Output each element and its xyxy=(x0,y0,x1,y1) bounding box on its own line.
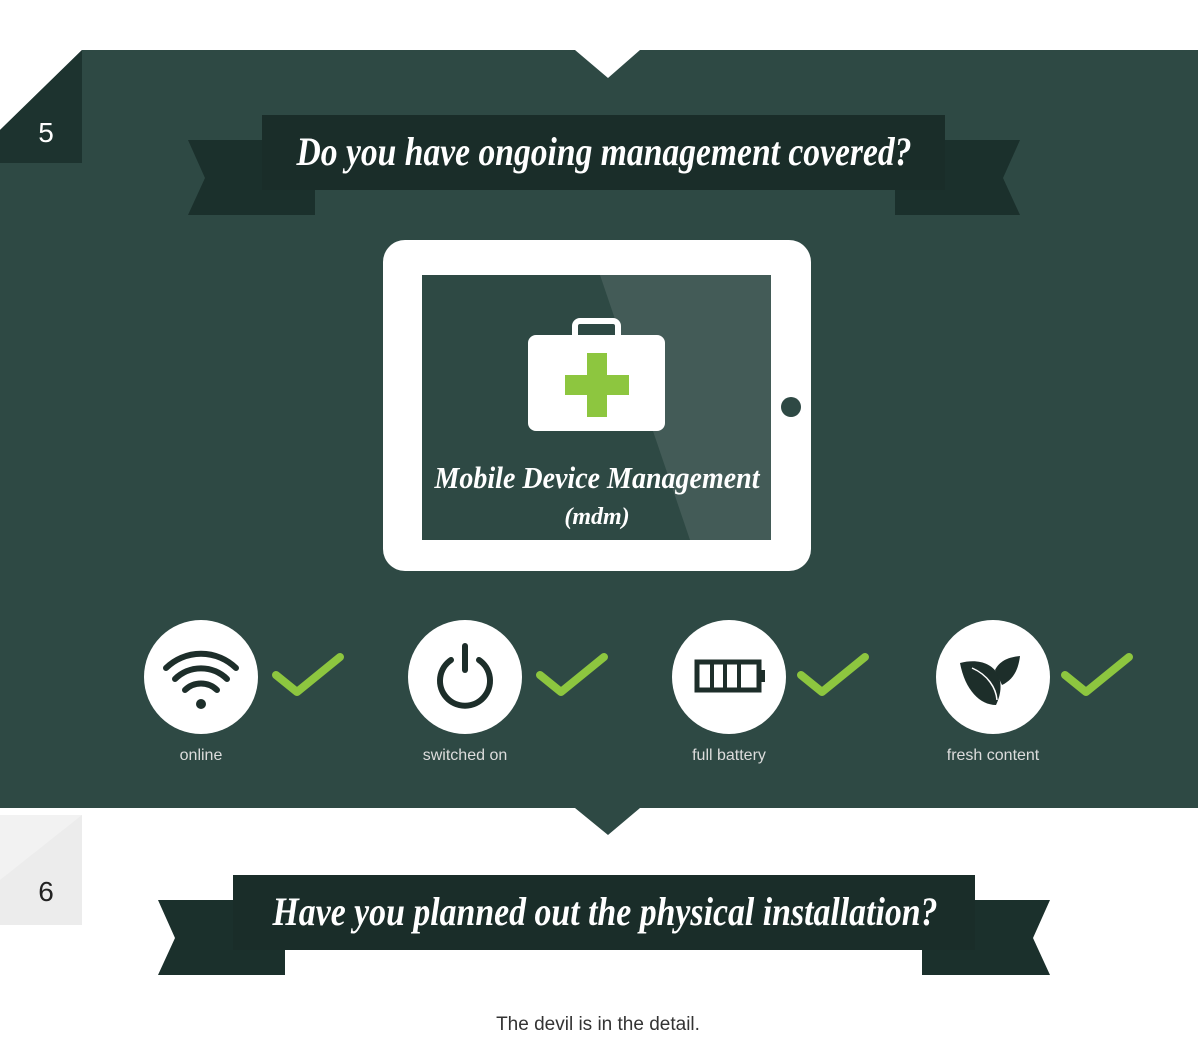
status: online: online xyxy=(180,747,222,764)
number badge 6 xyxy=(0,815,82,925)
text: mobile device management xyxy=(434,460,761,530)
status: fresh content: fresh content xyxy=(947,747,1040,764)
ribbon: section 5 title: Do you have ongoing management covered? xyxy=(296,129,912,174)
ribbon: section 5 title xyxy=(188,115,1020,215)
status: full battery xyxy=(672,620,865,764)
panel: section 5 background xyxy=(0,50,1198,835)
status: full battery: full battery xyxy=(692,747,766,764)
text: mobile device management: Mobile Device Management xyxy=(434,460,761,495)
text: devil is in the detail: The devil is in the detail. xyxy=(496,1014,700,1035)
number badge 5 xyxy=(0,50,82,163)
icon: home button xyxy=(781,397,801,417)
status: switched on: switched on xyxy=(423,747,507,764)
status: fresh content xyxy=(936,620,1129,764)
number badge 6: 6 xyxy=(38,876,54,907)
icon: medical kit xyxy=(528,321,665,431)
text: mobile device management: (mdm) xyxy=(564,504,630,530)
status: online xyxy=(144,620,340,764)
number badge 5: 5 xyxy=(38,117,54,148)
tablet illustration xyxy=(383,240,811,571)
ribbon: section 6 title: Have you planned out the physical installation? xyxy=(272,889,937,934)
status: switched on xyxy=(408,620,604,764)
ribbon: section 6 title xyxy=(158,875,1050,975)
